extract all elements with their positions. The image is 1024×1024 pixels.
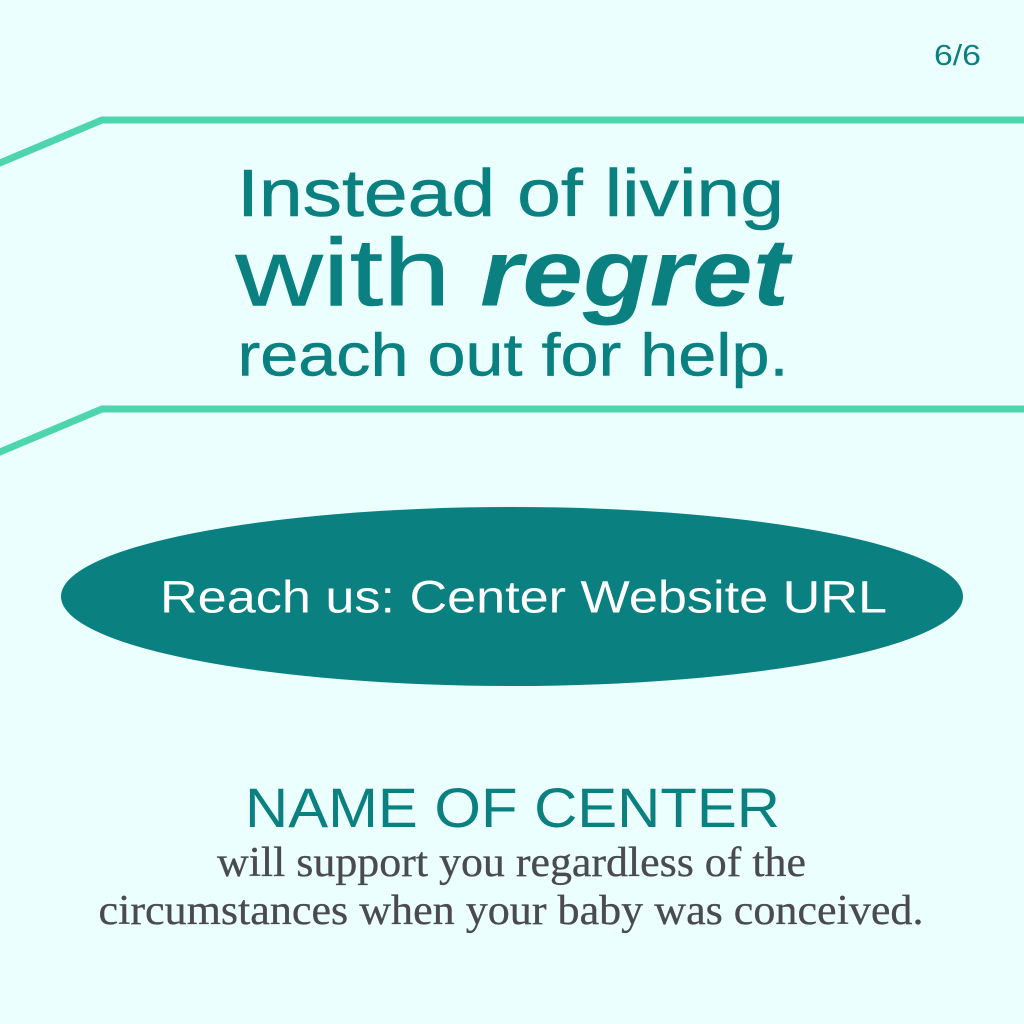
headline line 2: with: with (234, 220, 450, 326)
support statement line 2: circumstances when your baby was conceived. (98, 888, 924, 934)
headline line 2: regret: regret (480, 220, 794, 326)
call to action text: Reach us: Center Website URL (160, 572, 887, 622)
headline line 3: reach out for help. (238, 322, 788, 388)
bottom accent line (0, 409, 1024, 454)
support statement line 1: will support you regardless of the (217, 840, 806, 886)
top accent line (0, 120, 1024, 165)
center name: NAME OF CENTER (245, 776, 780, 839)
headline line 1: Instead of living (237, 156, 784, 231)
headline (234, 156, 794, 388)
page number: 6/6 (934, 40, 981, 72)
call to action ellipse (61, 507, 963, 686)
support statement (98, 840, 924, 934)
